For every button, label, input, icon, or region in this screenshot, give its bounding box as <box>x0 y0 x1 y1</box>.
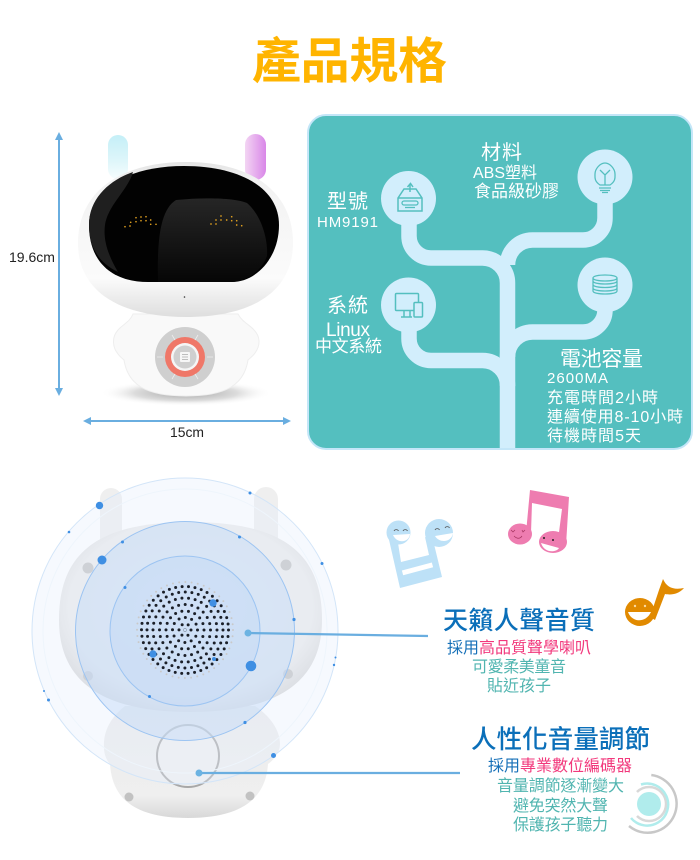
left ear light <box>108 135 128 179</box>
screen <box>89 166 279 282</box>
icon: blue music note <box>386 519 453 588</box>
text block: sound quality <box>443 607 595 695</box>
volume knob <box>157 725 219 787</box>
panel: specifications <box>308 115 692 449</box>
detail lines: 採用專業數位編碼器 <box>488 757 632 775</box>
icon: volume dial <box>629 775 677 833</box>
text block: sound quality: 貼近孩子 <box>487 677 551 695</box>
text: material: 材料 <box>481 141 522 164</box>
text block: sound quality: 可愛柔美童音 <box>472 657 566 676</box>
width label: 15cm <box>170 424 204 440</box>
text block: volume control: 避免突然大聲 <box>513 797 608 815</box>
icon: orange music note <box>625 579 684 626</box>
text: system: 中文系統 <box>315 337 382 356</box>
sound wave rings <box>32 478 338 784</box>
text: battery capacity <box>547 348 683 445</box>
heading: sound quality: 天籟人聲音質 <box>443 607 595 635</box>
right ear light <box>245 134 266 180</box>
product photo: robot front view <box>78 134 293 406</box>
height dimension arrow <box>55 132 63 396</box>
icon: archive box <box>381 171 436 226</box>
screw holes <box>82 560 293 802</box>
product photo: robot back view with sound waves <box>32 478 338 818</box>
back body <box>104 706 280 818</box>
callout line: speaker <box>244 630 428 636</box>
eyes <box>125 216 242 227</box>
control disc <box>155 327 215 387</box>
text: material: ABS塑料 <box>473 164 537 182</box>
tree branches <box>409 177 605 448</box>
text: battery capacity: 連續使用8-10小時 <box>547 408 683 426</box>
text: model <box>317 190 378 231</box>
text: battery capacity: 2600MA <box>547 370 608 387</box>
back head <box>59 522 322 712</box>
icon: pink music note <box>508 490 569 553</box>
height label: 19.6cm <box>9 249 55 265</box>
width dimension arrow <box>83 417 291 425</box>
heading: volume control: 人性化音量調節 <box>471 726 650 754</box>
icon: battery stack <box>578 258 632 312</box>
text: battery capacity: 電池容量 <box>560 348 643 371</box>
text: system: 系統 <box>327 294 368 317</box>
callout line: volume knob <box>196 770 460 776</box>
text block: volume control: 音量調節逐漸變大 <box>497 776 624 795</box>
text: model: 型號 <box>327 190 368 213</box>
text: model: HM9191 <box>317 214 378 231</box>
icon: light bulb <box>578 150 632 204</box>
icon: computer and phone <box>381 278 436 332</box>
speaker holes <box>137 582 233 678</box>
back ears <box>100 488 122 550</box>
title: 產品規格 <box>252 35 447 89</box>
text: system <box>315 294 382 356</box>
text: system: Linux <box>326 320 370 341</box>
text block: volume control: 保護孩子聽力 <box>513 816 608 834</box>
text: material: 食品級砂膠 <box>474 182 559 201</box>
text: battery capacity: 待機時間5天 <box>547 427 641 445</box>
text: battery capacity: 充電時間2小時 <box>547 389 658 407</box>
blue sparkle dots <box>43 492 336 758</box>
text block: volume control <box>471 726 650 834</box>
text: material <box>473 141 559 201</box>
detail lines: 採用高品質聲學喇叭 <box>447 639 591 657</box>
